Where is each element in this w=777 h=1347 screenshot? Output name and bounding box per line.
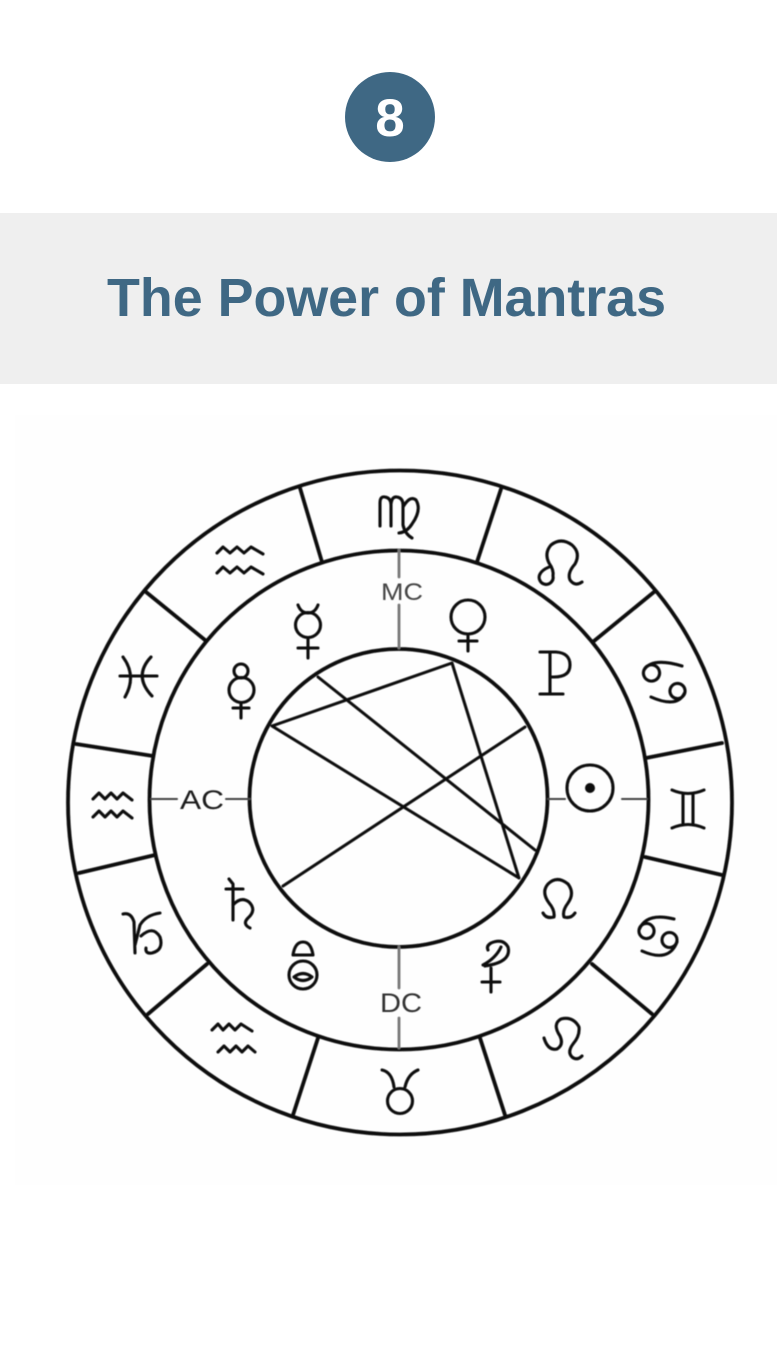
icon: aquarius upper left bbox=[217, 547, 263, 574]
step number badge: 8 bbox=[375, 89, 405, 148]
icon: sun bbox=[567, 765, 613, 811]
axis lines bbox=[151, 550, 647, 1048]
icon: leo lower right bbox=[544, 1018, 582, 1059]
icon: aquarius lower left bbox=[212, 1024, 255, 1052]
icon: node omega bbox=[543, 880, 575, 918]
icon: chiron glyph bbox=[482, 941, 509, 992]
axis labels: DC bbox=[380, 988, 422, 1018]
icon: taurus bbox=[382, 1070, 418, 1087]
icon: cancer lower right bbox=[639, 917, 677, 955]
icon: pisces bbox=[120, 657, 157, 697]
title band bbox=[0, 213, 777, 384]
icon: aquarius left bbox=[93, 793, 132, 818]
aspect lines bbox=[272, 663, 535, 886]
icon: leo top right bbox=[539, 541, 582, 584]
axis labels bbox=[180, 579, 423, 1018]
icon: cancer upper right bbox=[643, 662, 685, 702]
icon: mercury bbox=[298, 605, 318, 658]
icon: saturn bbox=[226, 879, 253, 928]
step number badge bbox=[345, 72, 435, 162]
icon: venus bbox=[451, 600, 485, 634]
icon: virgo bbox=[380, 497, 418, 538]
icon: pluto P bbox=[540, 652, 570, 694]
axis labels: AC bbox=[180, 785, 224, 815]
outer zodiac ring bbox=[68, 470, 732, 1134]
icon: neptune glyph bbox=[293, 942, 313, 980]
axis labels: MC bbox=[381, 579, 423, 606]
astrological chart wheel bbox=[68, 470, 732, 1134]
inner aspect circle bbox=[250, 649, 548, 947]
title: The Power of Mantras bbox=[107, 268, 666, 328]
icon: ceres glyph bbox=[234, 664, 248, 678]
icon: gemini bbox=[672, 790, 704, 828]
icon: capricorn bbox=[123, 913, 161, 953]
